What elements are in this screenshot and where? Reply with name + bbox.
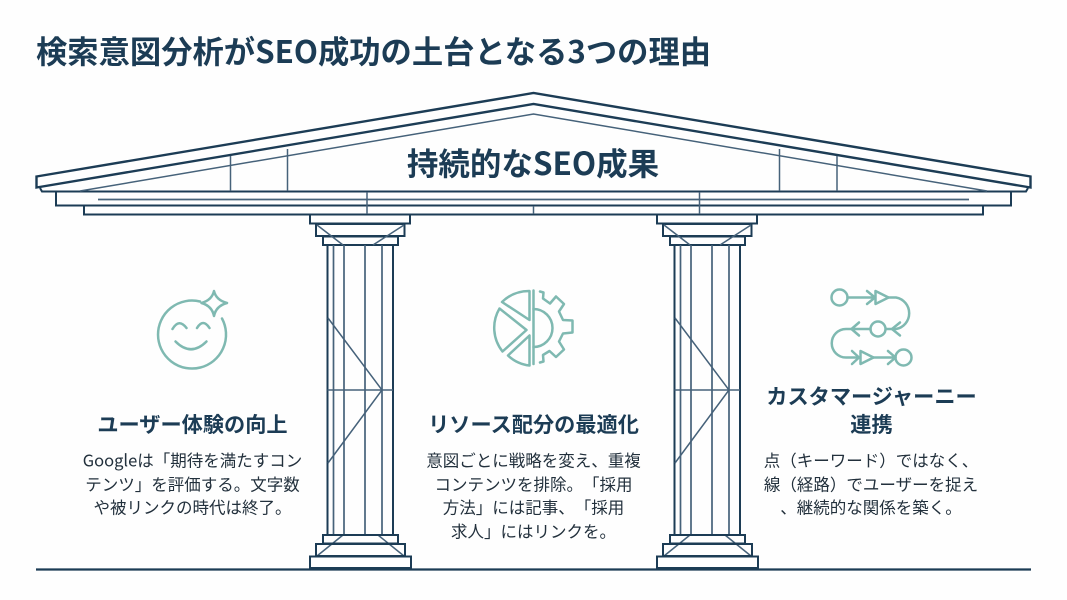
entablature [56,192,1011,214]
icon: pie chart and gear [494,290,572,366]
temple roof [36,93,1030,192]
panel text: user experience: Googleは「期待を満たすコン [83,448,302,472]
panel text: user experience: テンツ」を評価する。文字数 [85,472,300,496]
panel text: user experience: や被リンクの時代は終了。 [94,494,292,518]
panel text: user experience [83,408,302,518]
panel text: resource allocation: 意図ごとに戦略を変え、重複 [426,448,641,472]
panel text: user experience: ユーザー体験の向上 [97,408,288,439]
panel text: resource allocation: リソース配分の最適化 [428,408,639,439]
column: right [657,214,758,568]
ground line [36,568,1031,571]
roof label: 持続的なSEO成果 [407,139,659,185]
panel text: resource allocation: 方法」には記事、「採用 [443,494,624,518]
icon: customer journey path [832,290,912,366]
panel text: customer journey: 、継続的な関係を築く。 [780,494,962,518]
icon: smiling face with sparkle [158,291,227,369]
panel text: resource allocation: コンテンツを排除。「採用 [434,472,632,496]
panel text: customer journey [764,380,978,518]
panel text: resource allocation: 求人」にはリンクを。 [451,518,616,542]
title: 検索意図分析がSEO成功の土台となる3つの理由 [36,28,711,73]
panel text: customer journey: カスタマージャーニー [766,380,977,411]
column: left [310,214,411,568]
panel text: customer journey: 連携 [850,408,893,439]
panel text: customer journey: 点（キーワード）ではなく、 [764,448,978,472]
panel text: resource allocation [426,408,641,542]
panel text: customer journey: 線（経路）でユーザーを捉え [764,472,978,496]
